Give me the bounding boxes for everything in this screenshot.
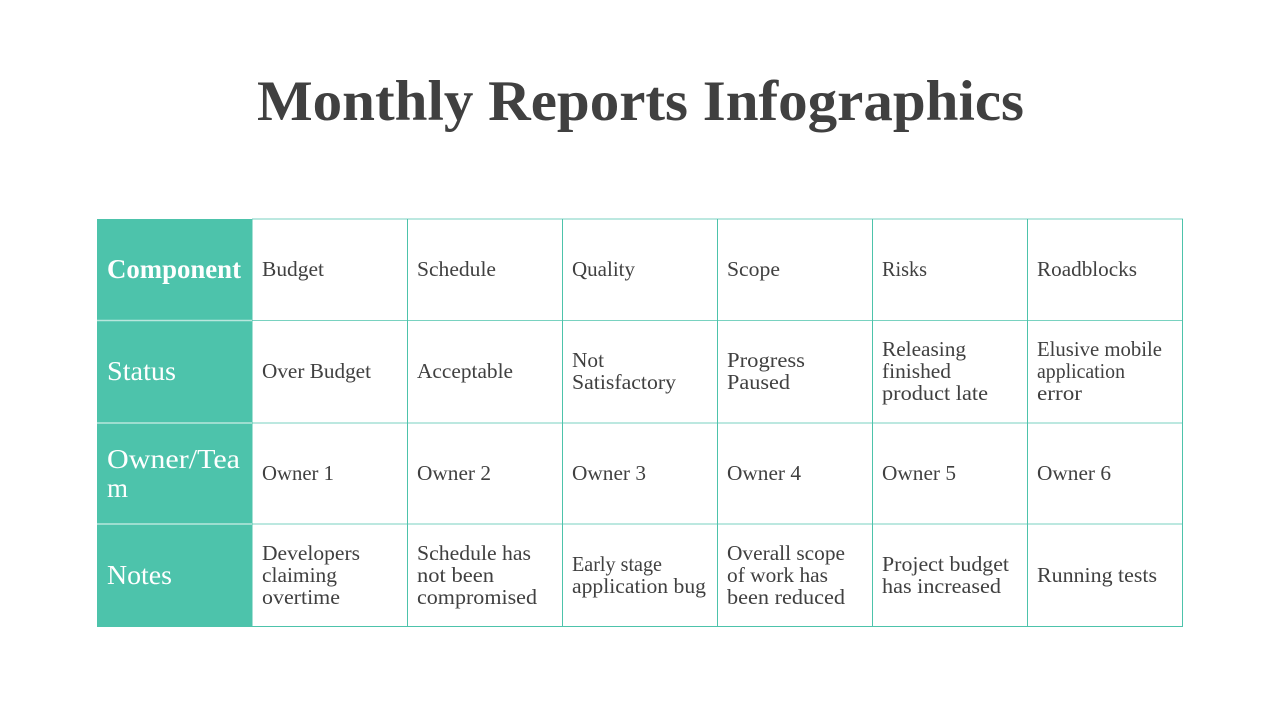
row: notes: overtime [262,585,340,609]
row: status [107,337,1162,405]
row: component: Risks [882,257,927,281]
row: component: Roadblocks [1037,257,1137,281]
row: status: Satisfactory [572,370,676,394]
row: notes: not been [417,563,494,587]
row: status: Acceptable [417,359,513,383]
row: component: Component [107,253,242,284]
row: owner/team [107,443,1111,503]
row: status: finished [882,359,951,383]
row: owner/team: Owner 1 [262,461,334,485]
row: status: application [1037,359,1125,383]
row: status: Paused [727,370,790,394]
row: status: Elusive mobile [1037,337,1162,361]
row: component: Budget [262,257,324,281]
row: status: Not [572,348,604,372]
row: notes: Running tests [1037,563,1157,587]
row: notes: has increased [882,574,1001,598]
table [97,219,1183,627]
row: notes: Developers [262,541,360,565]
row: notes: Project budget [882,552,1009,576]
row: owner/team: m [107,472,128,503]
row: notes: Schedule has [417,541,531,565]
row: notes: application bug [572,574,706,598]
row: owner/team: Owner 6 [1037,461,1111,485]
header column background [97,219,252,627]
row: notes: of work has [727,563,828,587]
row: notes: been reduced [727,585,845,609]
row: owner/team: Owner 5 [882,461,956,485]
row: notes [107,541,1157,609]
row: owner/team: Owner 2 [417,461,491,485]
row: owner/team: Owner/Tea [107,443,240,474]
row: component [107,253,1137,284]
row: status: Over Budget [262,359,371,383]
row: component: Quality [572,257,635,281]
row: status: error [1037,381,1082,405]
row: status: Releasing [882,337,966,361]
row: component: Schedule [417,257,496,281]
row: status: product late [882,381,988,405]
row: owner/team: Owner 4 [727,461,801,485]
row: notes: compromised [417,585,537,609]
row: notes: claiming [262,563,337,587]
row: status: Progress [727,348,805,372]
row: notes: Overall scope [727,541,845,565]
row: notes: Early stage [572,552,662,576]
row: status: Status [107,355,176,386]
row: owner/team: Owner 3 [572,461,646,485]
title: Monthly Reports Infographics [257,70,1024,133]
row: notes: Notes [107,559,172,590]
row: component: Scope [727,257,780,281]
